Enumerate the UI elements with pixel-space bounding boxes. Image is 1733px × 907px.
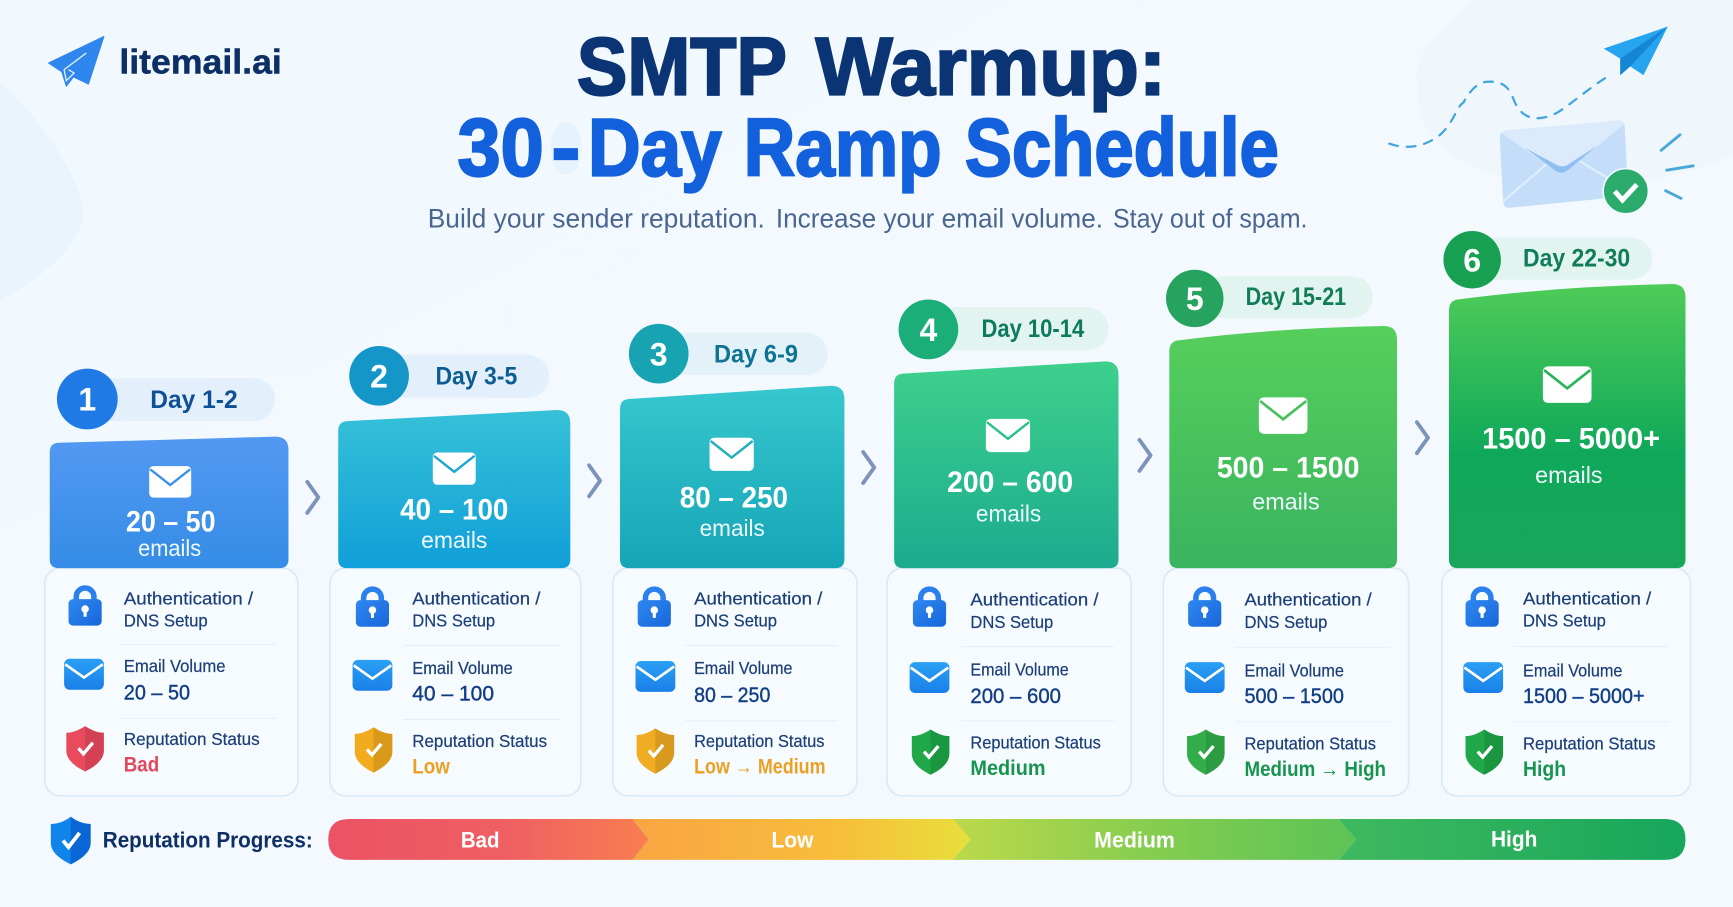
- icon: lock: [1466, 589, 1499, 627]
- segment: medium: [953, 819, 1356, 860]
- volume block 3: [620, 386, 844, 568]
- reputation: [412, 731, 547, 779]
- step 2: [330, 346, 581, 796]
- card 6 details: [1442, 568, 1690, 796]
- reputation: Medium → High: [1244, 758, 1386, 781]
- title line 1: SMTP: [577, 22, 787, 113]
- icon: envelope: [1500, 120, 1628, 208]
- dashed flight path: [1389, 76, 1608, 147]
- volume block 2: emails: [421, 527, 487, 553]
- volume block 6: [1449, 284, 1685, 568]
- reputation: Low: [412, 756, 450, 779]
- title line 1: [577, 22, 1166, 113]
- auth label: [970, 590, 1099, 632]
- step 3: [613, 324, 857, 796]
- card 4 details: [887, 568, 1131, 796]
- volume: 1500 – 5000+: [1523, 685, 1645, 708]
- volume block 4: 200 – 600: [947, 466, 1073, 499]
- segment: bad: [328, 819, 649, 860]
- volume block 3: 80 – 250: [680, 481, 788, 514]
- auth label: DNS Setup: [412, 611, 495, 631]
- auth label: Authentication /: [1244, 590, 1372, 610]
- reputation: Reputation Status: [124, 729, 260, 749]
- auth label: Authentication /: [970, 590, 1099, 610]
- volume block 1: [50, 437, 288, 568]
- volume block 5: emails: [1252, 489, 1320, 515]
- day pill 2: [349, 346, 549, 406]
- segment: medium: Medium: [1094, 828, 1175, 853]
- volume block 1: 20 – 50: [126, 506, 216, 539]
- reputation: Reputation Status: [412, 731, 547, 751]
- volume: [124, 656, 226, 705]
- progress bar: [328, 819, 1685, 860]
- volume: [970, 659, 1069, 708]
- reputation: Bad: [124, 753, 159, 776]
- reputation: Medium: [970, 757, 1046, 780]
- icon: paper plane logo: [49, 36, 104, 86]
- auth label: DNS Setup: [970, 612, 1053, 632]
- segment: low: Low: [771, 828, 814, 853]
- reputation: Reputation Status: [694, 731, 825, 751]
- day pill 5: [1166, 270, 1373, 327]
- icon: lock: [913, 589, 946, 627]
- segment: low: [632, 819, 970, 860]
- card 3 details: [613, 568, 857, 796]
- reputation: Reputation Status: [970, 732, 1101, 752]
- day pill 5: 5: [1186, 281, 1204, 317]
- legend label: Reputation Progress:: [103, 828, 313, 853]
- auth label: Authentication /: [124, 589, 253, 609]
- icon: mail: [636, 661, 675, 692]
- icon: mail: [910, 662, 949, 693]
- volume: 500 – 1500: [1244, 685, 1344, 708]
- brand name: litemail.ai: [119, 44, 282, 82]
- day pill 3: [629, 324, 828, 384]
- reputation: [970, 732, 1101, 780]
- step 4: [887, 300, 1131, 796]
- icon: shield low to medium: [637, 728, 674, 774]
- reputation: Reputation Status: [1523, 733, 1656, 753]
- illustration: plane, dashed path and envelope: [1389, 27, 1693, 214]
- step 6: [1442, 231, 1690, 796]
- title line 2: Day: [588, 103, 722, 194]
- reputation: High: [1523, 758, 1566, 781]
- volume: 20 – 50: [124, 682, 190, 705]
- volume: [1244, 660, 1344, 708]
- title line 2: Ramp: [744, 103, 942, 194]
- volume: 200 – 600: [970, 685, 1061, 708]
- icon: lock: [1188, 589, 1221, 627]
- volume block 4: [894, 361, 1118, 568]
- title line 2: Schedule: [965, 103, 1279, 194]
- arrow 5: [1417, 422, 1428, 453]
- logo: litemail.ai: [49, 36, 282, 86]
- subtitle: [428, 204, 1307, 234]
- volume block 4: emails: [976, 501, 1041, 527]
- day pill 1: [57, 369, 275, 429]
- volume block 1: emails: [138, 535, 201, 561]
- day pill 2: Day 3-5: [435, 363, 517, 391]
- step 5: [1163, 270, 1409, 796]
- title line 2: 30: [458, 103, 544, 194]
- volume block 6: 1500 – 5000+: [1482, 423, 1660, 456]
- icon: shield low: [355, 727, 392, 773]
- icon: check badge: [1603, 169, 1648, 214]
- day pill 6: [1443, 231, 1652, 288]
- arrow 4: [1139, 440, 1151, 471]
- arrow 2: [589, 465, 600, 496]
- title: [458, 22, 1279, 194]
- volume block 5: [1169, 326, 1397, 568]
- icon: shield high: [1466, 729, 1503, 775]
- card 2 details: [330, 568, 581, 796]
- day pill 6: 6: [1463, 242, 1481, 278]
- day pill 1: Day 1-2: [150, 386, 238, 414]
- day pill 1: 1: [78, 382, 96, 418]
- volume: Email Volume: [1523, 660, 1623, 680]
- day pill 3: 3: [650, 336, 668, 372]
- volume block 6: emails: [1535, 462, 1603, 488]
- reputation: [124, 729, 260, 776]
- auth label: DNS Setup: [124, 611, 208, 631]
- icon: shield medium: [912, 729, 949, 775]
- day pill 6: Day 22-30: [1523, 244, 1630, 272]
- subtitle: Stay out of spam.: [1113, 204, 1307, 234]
- icon: mail: [1463, 662, 1503, 693]
- subtitle: Increase your email volume.: [776, 204, 1103, 234]
- volume block 2: 40 – 100: [400, 493, 508, 526]
- card 5 details: [1163, 568, 1409, 796]
- auth label: [124, 589, 253, 631]
- auth label: DNS Setup: [1523, 611, 1606, 631]
- auth label: Authentication /: [694, 589, 822, 609]
- day pill 4: Day 10-14: [981, 315, 1084, 343]
- day pill 4: 4: [919, 312, 937, 348]
- volume: Email Volume: [1244, 660, 1344, 680]
- volume: 80 – 250: [694, 684, 770, 707]
- card 1 details: [45, 568, 298, 796]
- volume: Email Volume: [970, 659, 1069, 679]
- volume: 40 – 100: [412, 683, 494, 706]
- reputation: Low → Medium: [694, 756, 826, 779]
- subtitle: Build your sender reputation.: [428, 204, 765, 234]
- volume: Email Volume: [412, 658, 513, 678]
- segment: bad: Bad: [461, 828, 500, 853]
- volume block 3: emails: [700, 515, 765, 541]
- volume: [412, 658, 513, 706]
- volume block 5: 500 – 1500: [1217, 451, 1359, 484]
- auth label: [1244, 590, 1372, 632]
- arrow 3: [863, 452, 874, 483]
- day pill 2: 2: [370, 358, 388, 394]
- icon: paper plane: [1604, 27, 1668, 75]
- auth label: Authentication /: [1523, 589, 1651, 609]
- volume: [694, 658, 793, 707]
- reputation: [694, 731, 826, 779]
- sparkle lines: [1661, 135, 1693, 198]
- volume: Email Volume: [694, 658, 793, 678]
- volume: Email Volume: [124, 656, 226, 676]
- title line 1: Warmup:: [816, 22, 1166, 113]
- step 1: [45, 369, 298, 796]
- reputation: [1244, 733, 1386, 781]
- icon: mail: [353, 660, 392, 691]
- icon: mail: [1185, 662, 1225, 693]
- icon: shield medium to high: [1187, 729, 1225, 775]
- segment: high: High: [1491, 827, 1537, 852]
- arrow 1: [307, 482, 318, 513]
- auth label: [694, 589, 822, 631]
- title line 2: [458, 103, 1279, 194]
- day pill 5: Day 15-21: [1246, 283, 1346, 311]
- volume block 2: [338, 410, 570, 568]
- day pill 3: Day 6-9: [714, 341, 798, 369]
- auth label: DNS Setup: [694, 611, 777, 631]
- segment: high: [1338, 819, 1685, 860]
- reputation progress legend: [51, 817, 1685, 864]
- volume: [1523, 660, 1645, 708]
- auth label: [412, 589, 541, 631]
- auth label: Authentication /: [412, 589, 541, 609]
- icon: mail: [64, 659, 104, 690]
- reputation: Reputation Status: [1244, 733, 1376, 753]
- auth label: DNS Setup: [1244, 612, 1328, 632]
- icon: blue shield: [51, 817, 91, 864]
- day pill 4: [899, 300, 1109, 359]
- reputation: [1523, 733, 1656, 781]
- icon: lock: [356, 589, 389, 627]
- title line 2: -: [552, 103, 580, 194]
- icon: lock: [69, 588, 102, 626]
- auth label: [1523, 589, 1651, 631]
- icon: lock: [638, 589, 671, 627]
- icon: shield bad: [66, 726, 104, 771]
